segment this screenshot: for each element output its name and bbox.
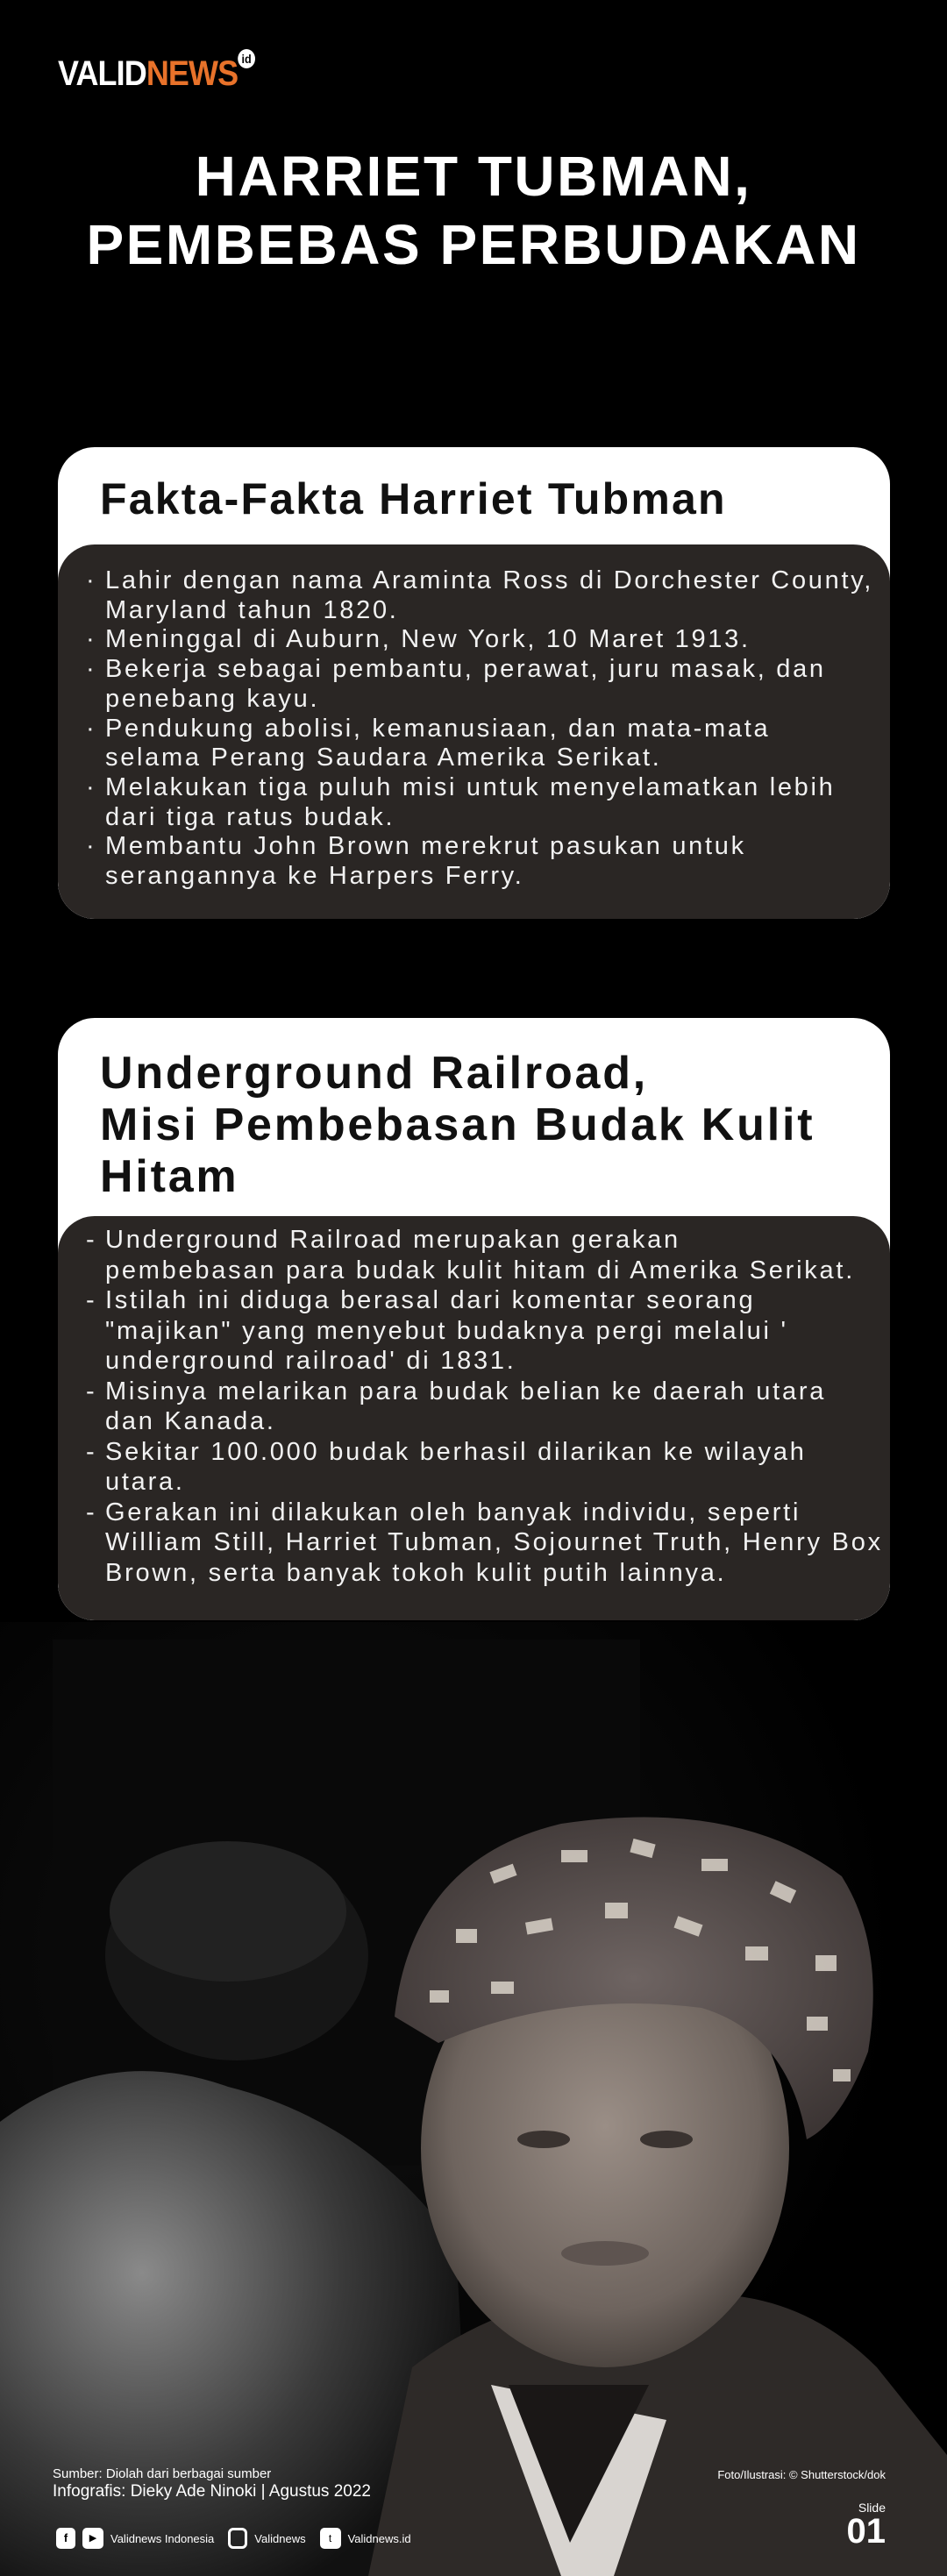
facts list: · [86,566,96,594]
railroad list: pembebasan para budak kulit hitam di Amerika Serikat. [105,1256,855,1284]
railroad list: - [86,1438,96,1466]
panel: Underground Railroad [58,1018,890,1620]
facts list: · [86,832,96,860]
railroad list: - [86,1498,96,1526]
source credits: Sumber: Diolah dari berbagai sumber [53,2466,271,2481]
railroad list: Gerakan ini dilakukan oleh banyak individu, seperti [105,1498,801,1526]
railroad list: dan Kanada. [105,1407,276,1435]
social icons: Validnews.id [348,2532,411,2544]
railroad list: - [86,1226,96,1254]
facts list: Meninggal di Auburn, New York, 10 Maret 1913. [105,625,751,653]
facts list: · [86,655,96,683]
title [86,145,861,276]
railroad list: - [86,1286,96,1314]
social icons: Validnews [254,2532,306,2544]
heading: underground railroad: Misi Pembebasan Budak Kulit [100,1099,815,1150]
railroad list: - [86,1377,96,1405]
facts list: Lahir dengan nama Araminta Ross di Dorchester County, [105,566,873,594]
railroad list: utara. [105,1468,185,1496]
title: HARRIET TUBMAN, [196,145,751,208]
railroad list: "majikan" yang menyebut budaknya pergi melalui ' [105,1317,788,1345]
panel: Fakta-Fakta Harriet Tubman [58,447,890,919]
railroad list: William Still, Harriet Tubman, Sojournet Truth, Henry Box [105,1528,883,1556]
source credits: Infografis: Dieky Ade Ninoki | Agustus 2022 [53,2482,371,2501]
railroad list: Brown, serta banyak tokoh kulit putih lainnya. [105,1559,726,1587]
facts list: serangannya ke Harpers Ferry. [105,862,524,890]
railroad list: Underground Railroad merupakan gerakan [105,1226,680,1254]
railroad list [58,1216,890,1620]
heading: underground railroad: Underground Railroad, [100,1048,648,1099]
heading: underground railroad: Hitam [100,1151,239,1202]
title: PEMBEBAS PERBUDAKAN [86,213,861,276]
social icons: ▶ [89,2533,96,2544]
source credits [53,2466,371,2501]
social icons [56,2528,411,2549]
facts list: · [86,625,96,653]
facts list: Membantu John Brown merekrut pasukan untuk [105,832,746,860]
social icons: f [64,2531,68,2544]
railroad list: Istilah ini diduga berasal dari komentar seorang [105,1286,755,1314]
facts list: selama Perang Saudara Amerika Serikat. [105,744,662,772]
heading: facts: Fakta-Fakta Harriet Tubman [100,474,727,523]
railroad list: underground railroad' di 1831. [105,1347,516,1375]
photo background [0,1640,947,2576]
facts list [58,544,890,919]
facts list: Bekerja sebagai pembantu, perawat, juru masak, dan [105,655,826,683]
facts list: · [86,715,96,743]
social icons: Validnews Indonesia [110,2532,214,2544]
facts list: dari tiga ratus budak. [105,803,395,831]
figure: man [0,1841,474,2576]
facts list: Melakukan tiga puluh misi untuk menyelamatkan lebih [105,773,835,801]
slide number: Slide [858,2501,886,2515]
slide number: 01 [847,2512,886,2551]
railroad list: Misinya melarikan para budak belian ke daerah utara [105,1377,826,1405]
heading: underground railroad [100,1048,815,1202]
photo credit: Foto/Ilustrasi: © Shutterstock/dok [717,2468,886,2481]
facts list: Maryland tahun 1820. [105,596,399,624]
facts list: Pendukung abolisi, kemanusiaan, dan mata-mata [105,715,770,743]
logo: VALIDNEWS [58,54,238,93]
social icons: t [329,2532,331,2544]
text: id [242,52,252,66]
figure: Harriet Tubman portrait [368,1817,947,2576]
facts list: penebang kayu. [105,685,319,713]
railroad list: Sekitar 100.000 budak berhasil dilarikan ke wilayah [105,1438,807,1466]
facts list: · [86,773,96,801]
